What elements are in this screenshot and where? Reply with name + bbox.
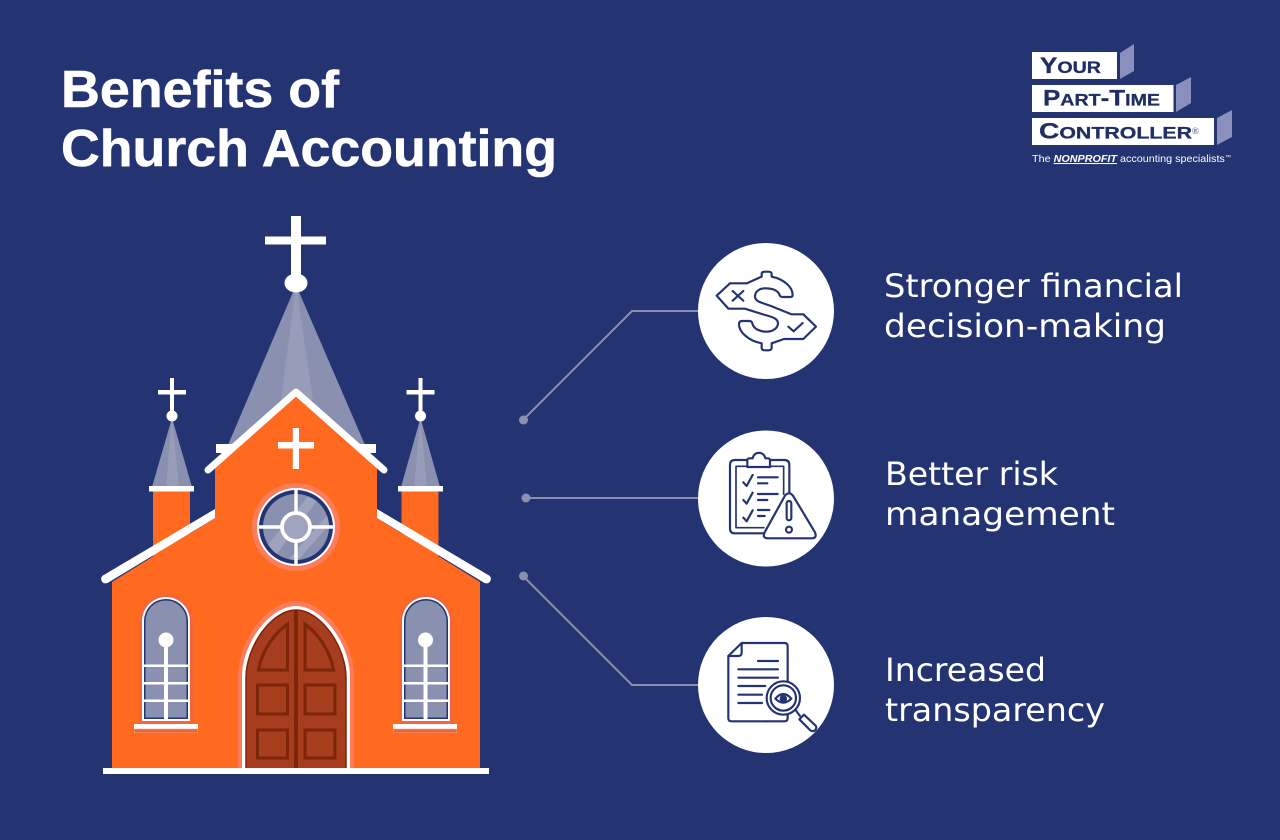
logo: Your Part-Time Controller: ® bbox=[1192, 126, 1199, 136]
logo: Your Part-Time Controller: The NONPROFIT accounting specialists bbox=[1032, 153, 1222, 165]
logo: Your Part-Time Controller: CONTROLLER bbox=[1039, 118, 1192, 144]
logo: Your Part-Time Controller: YOUR bbox=[1040, 53, 1101, 78]
logo: Your Part-Time Controller: PART-TIME bbox=[1043, 86, 1160, 110]
ground line bbox=[103, 768, 489, 774]
text: Stronger financial decision-making: Stronger financial bbox=[884, 267, 1183, 305]
connector: risk management bbox=[522, 494, 698, 502]
rose window bbox=[252, 483, 340, 571]
text: Increased transparency: transparency bbox=[885, 691, 1105, 729]
roof lines bbox=[101, 392, 491, 583]
text: Better risk management: Better risk bbox=[885, 455, 1058, 493]
tower cross bbox=[278, 428, 314, 469]
door bbox=[238, 601, 354, 769]
connector: transparency bbox=[519, 572, 698, 685]
title: Church Accounting bbox=[61, 120, 557, 178]
church body bbox=[112, 396, 480, 769]
text: Better risk management: management bbox=[885, 495, 1115, 533]
right side tower bbox=[398, 378, 443, 560]
left side tower bbox=[149, 378, 194, 560]
connector: financial decision-making bbox=[519, 311, 698, 424]
text: Stronger financial decision-making bbox=[884, 267, 1183, 345]
text: Better risk management bbox=[885, 455, 1115, 533]
main spire bbox=[216, 216, 376, 453]
logo: Your Part-Time Controller bbox=[1032, 44, 1232, 165]
icon: dollar sign with cross and check bbox=[698, 243, 834, 379]
title: Benefits of bbox=[61, 61, 340, 119]
logo: Your Part-Time Controller: ™ bbox=[1225, 154, 1231, 161]
text: Stronger financial decision-making: decision-making bbox=[884, 307, 1166, 345]
illustration: church bbox=[101, 216, 491, 774]
left window bbox=[134, 594, 198, 733]
icon: clipboard checklist with warning bbox=[698, 430, 834, 566]
icon: document with magnifier and eye bbox=[698, 617, 834, 753]
title bbox=[61, 61, 557, 178]
text: Increased transparency bbox=[885, 651, 1105, 729]
text: Increased transparency: Increased bbox=[885, 651, 1046, 689]
right window bbox=[393, 594, 457, 733]
